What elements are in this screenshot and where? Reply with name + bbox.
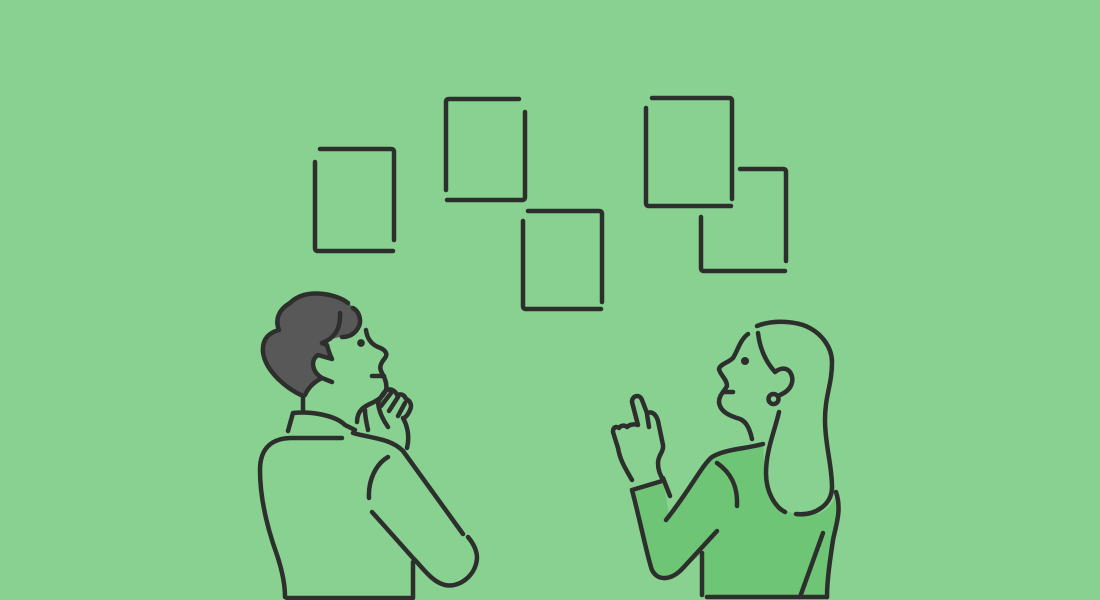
- woman: sweater lines: [632, 444, 839, 597]
- man: torso and arm: [260, 433, 477, 598]
- man: [260, 294, 477, 598]
- sheet 1: [315, 149, 394, 251]
- sheet 2: [446, 99, 525, 200]
- woman: [613, 322, 839, 597]
- man: hand on chin: [365, 389, 411, 448]
- sheet 4: [646, 98, 732, 206]
- woman: pointing hand: [613, 396, 663, 480]
- sheet 5: [701, 169, 786, 271]
- woman: face: [719, 334, 752, 439]
- man: collar and neck: [288, 397, 355, 431]
- sheet 3: [523, 211, 602, 309]
- man: hair: [263, 294, 360, 396]
- woman: hair: [757, 322, 832, 514]
- man: face: [357, 330, 386, 422]
- woman: sweater fill: [632, 444, 838, 597]
